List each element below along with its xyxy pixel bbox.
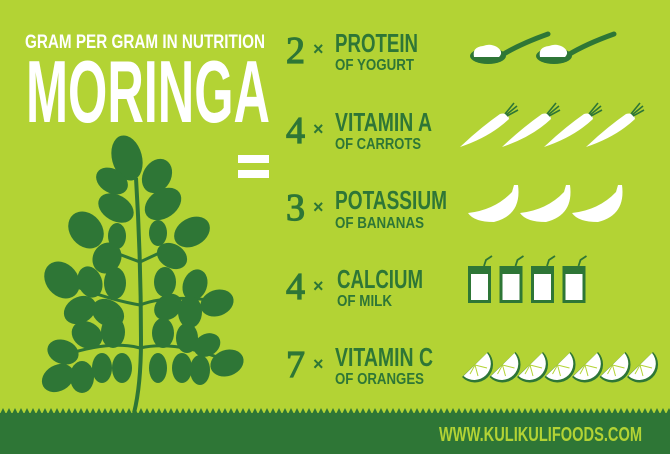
- row: calcium: OF MILK: [337, 293, 392, 310]
- row: potassium: POTASSIUM: [335, 185, 447, 215]
- row: potassium: ×: [313, 197, 324, 217]
- row: vitamin A: [286, 107, 432, 153]
- row: vitamin C: OF ORANGES: [335, 371, 424, 388]
- row: protein: [286, 28, 418, 74]
- row: vitamin C: VITAMIN C: [335, 342, 433, 372]
- row: vitamin A: ×: [313, 119, 324, 139]
- icons: bananas: [468, 185, 622, 222]
- row: protein: OF YOGURT: [335, 57, 414, 74]
- footer band: [0, 404, 670, 454]
- row: potassium: [286, 185, 447, 232]
- icons: yogurt spoons: [470, 34, 614, 64]
- equals sign: [238, 155, 269, 178]
- row: calcium: 4: [286, 266, 305, 308]
- row: vitamin C: ×: [313, 354, 324, 374]
- icons: carrots: [460, 103, 644, 147]
- row: protein: ×: [313, 39, 324, 59]
- row: vitamin A: 4: [286, 110, 305, 152]
- icons: lime slices: [462, 352, 658, 383]
- row: calcium: [286, 264, 423, 310]
- row: vitamin C: [286, 342, 433, 388]
- row: calcium: ×: [313, 276, 324, 296]
- title: MORINGA: MORINGA: [26, 42, 270, 141]
- row: calcium: CALCIUM: [337, 264, 423, 294]
- subtitle: GRAM PER GRAM IN NUTRITION: [25, 32, 265, 53]
- row: vitamin C: 7: [286, 344, 305, 386]
- tree illustration: [37, 132, 247, 413]
- row: vitamin A: OF CARROTS: [335, 136, 421, 153]
- row: protein: PROTEIN: [335, 28, 418, 58]
- row: potassium: OF BANANAS: [335, 215, 424, 232]
- row: potassium: 3: [286, 187, 305, 229]
- row: vitamin A: VITAMIN A: [335, 107, 432, 137]
- icons: milk glasses: [468, 256, 586, 303]
- row: protein: 2: [286, 30, 305, 72]
